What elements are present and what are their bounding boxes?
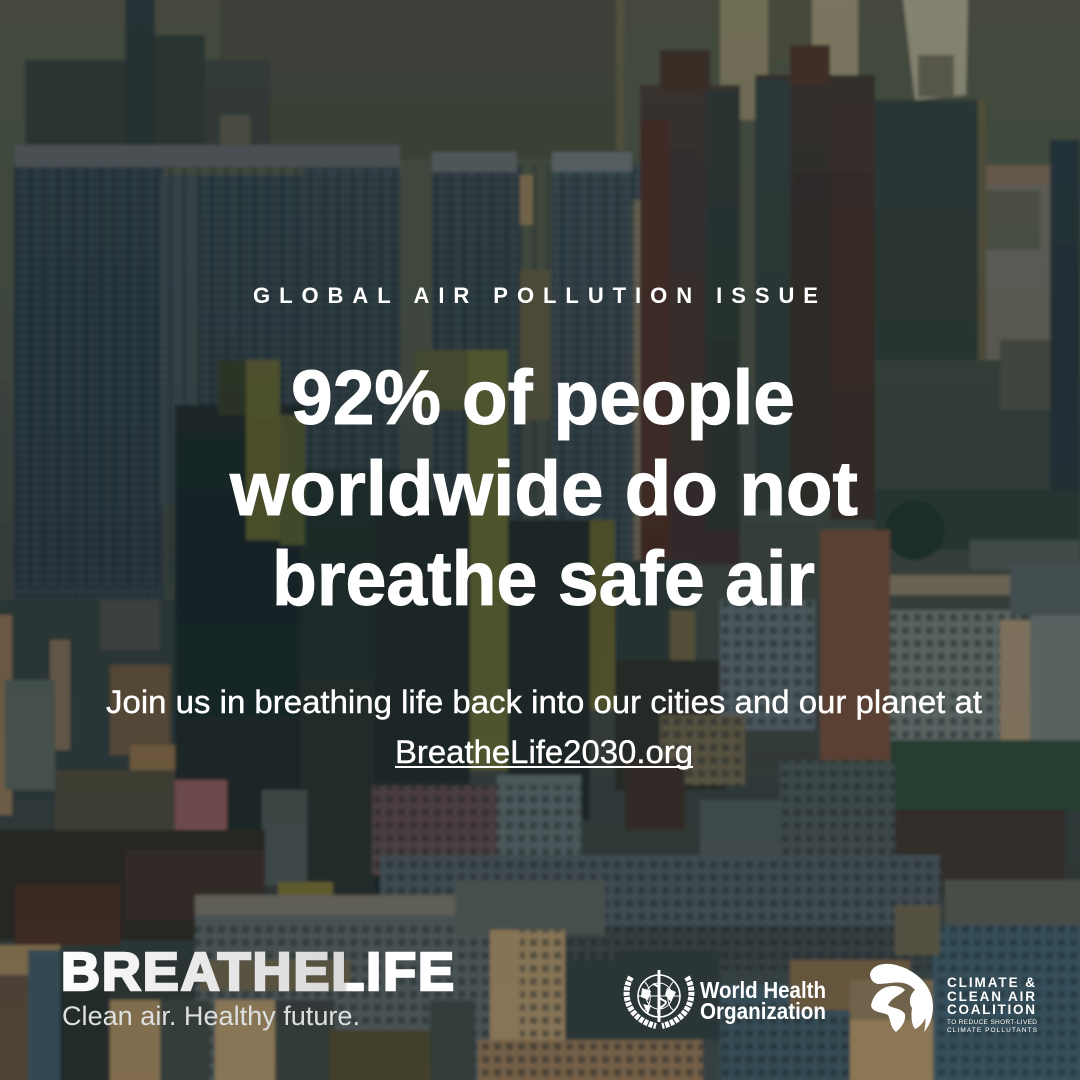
WHO wordmark (700, 977, 826, 1024)
headline: worldwide do not (229, 446, 858, 532)
CCAC wordmark: COALITION (947, 1002, 1035, 1017)
CCAC tagline: TO REDUCE SHORT-LIVED (947, 1019, 1037, 1026)
grey-blue mid-rise band (195, 855, 945, 1080)
central apartment block (372, 760, 1065, 880)
eyebrow heading: GLOBAL AIR POLLUTION ISSUE (253, 283, 818, 308)
blue residential towers (14, 145, 648, 700)
icon: WHO emblem (627, 970, 691, 1026)
CCAC wordmark (947, 975, 1035, 1017)
BreatheLife logo: BREATHELIFE (61, 942, 454, 1002)
BreatheLife logo (61, 942, 454, 1031)
upper-left dark towers (25, 0, 270, 165)
call to action text: BreatheLife2030.org (395, 734, 693, 770)
right midground (875, 340, 1080, 570)
CCAC logo (870, 964, 1038, 1034)
CCAC wordmark: CLIMATE & (947, 975, 1035, 990)
CCAC tagline (947, 1019, 1038, 1034)
CCAC tagline: CLIMATE POLLUTANTS (947, 1027, 1038, 1034)
CCAC wordmark: CLEAN AIR (947, 989, 1035, 1004)
dark foreground slab and green scaffolded towers (175, 350, 725, 920)
WHO logo (627, 970, 826, 1026)
headline: breathe safe air (272, 536, 815, 622)
far hazy towers (220, 0, 1050, 370)
WHO wordmark: World Health (700, 977, 826, 1003)
icon: CCAC globe with swoosh (870, 964, 933, 1032)
left midground low-rises (0, 600, 333, 945)
call to action text: Join us in breathing life back into our cities and our planet at (106, 684, 982, 720)
red-brown and dark tall towers (640, 45, 1080, 570)
headline: 92% of people (291, 355, 795, 441)
right lower buildings (625, 530, 1080, 830)
WHO wordmark: Organization (700, 998, 826, 1024)
headline (229, 355, 858, 622)
bottom tan and teal blocks (0, 880, 1080, 1080)
call to action text (106, 684, 982, 770)
BreatheLife logo: Clean air. Healthy future. (62, 1001, 360, 1031)
